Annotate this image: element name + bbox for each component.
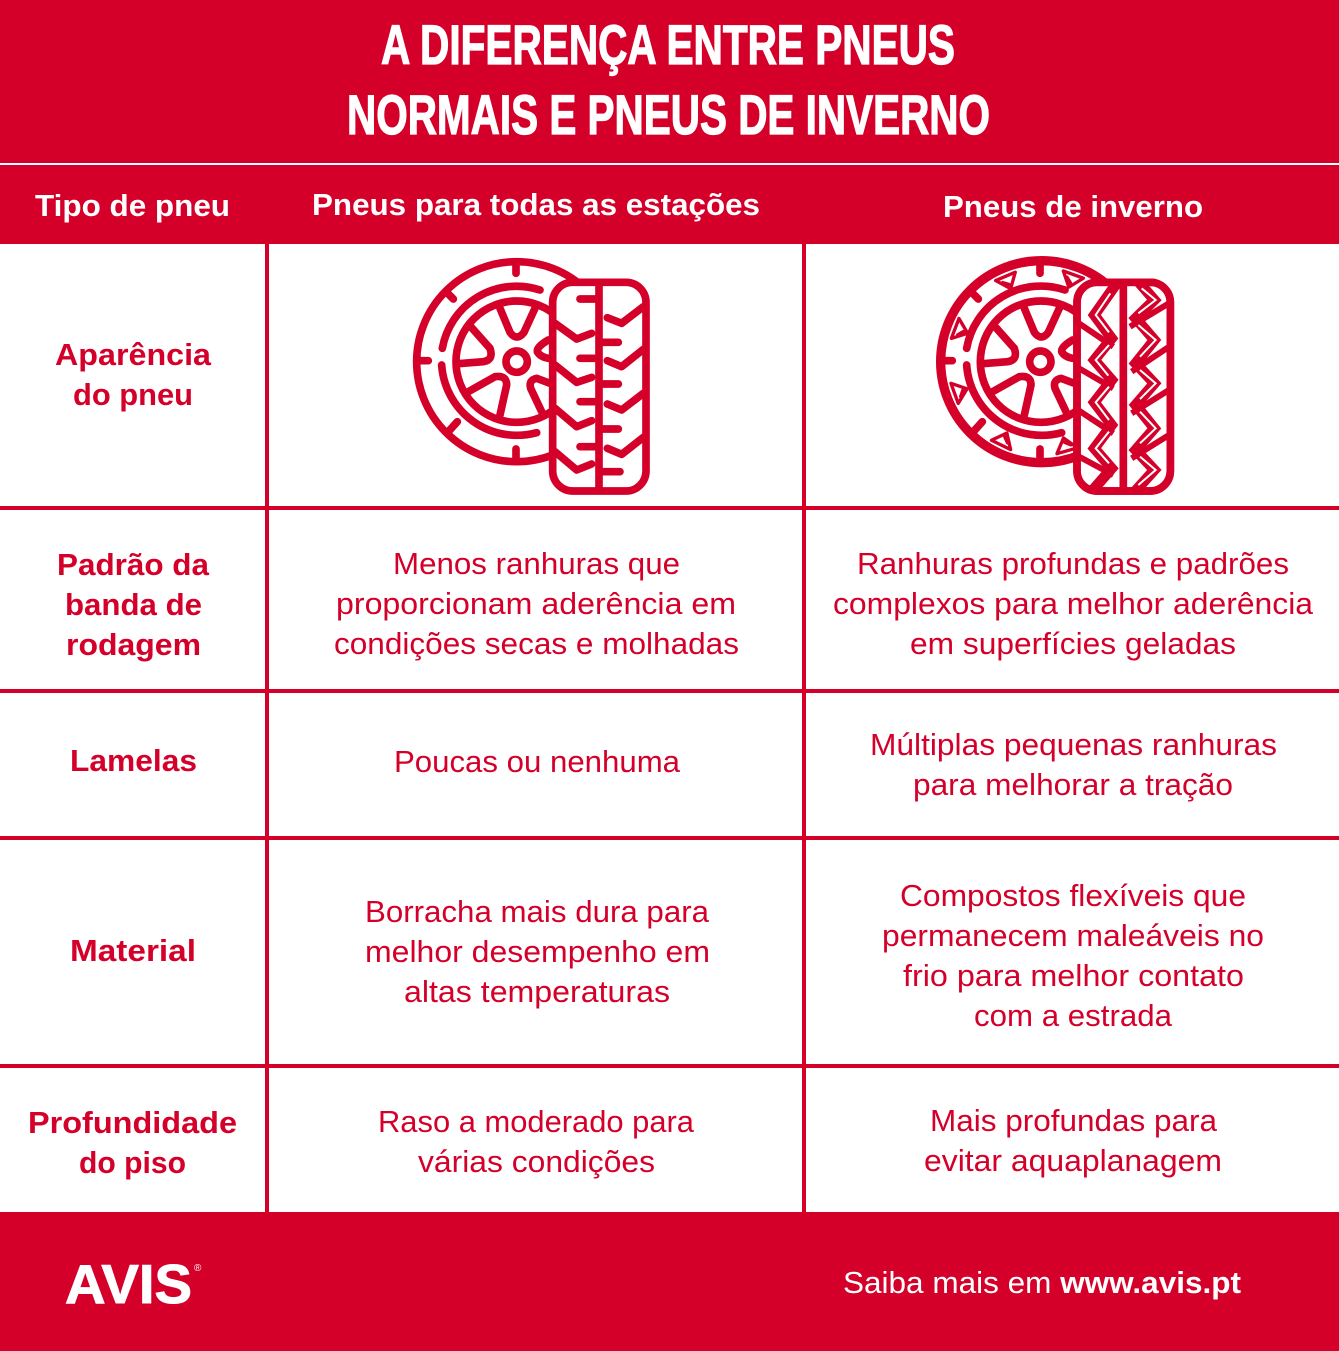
- winter text: Múltiplas pequenas ranhuras: [870, 727, 1277, 762]
- winter text: complexos para melhor aderência: [833, 586, 1314, 621]
- row label: do pneu: [73, 377, 193, 412]
- title banner: [0, 0, 1339, 163]
- all-season text: várias condições: [418, 1144, 655, 1179]
- title: NORMAIS E PNEUS DE INVERNO: [347, 83, 990, 146]
- call to action: Saiba mais em www.avis.pt: [843, 1265, 1241, 1300]
- winter text: frio para melhor contato: [903, 958, 1244, 993]
- row label: Padrão da: [57, 547, 210, 582]
- winter text: Ranhuras profundas e padrões: [857, 546, 1289, 581]
- winter text: [882, 878, 1264, 1033]
- all-season text: Borracha mais dura para: [365, 894, 710, 929]
- footer: [0, 1212, 1339, 1351]
- logo: AVIS: ®: [194, 1263, 202, 1274]
- header: winter tires: Pneus de inverno: [943, 189, 1203, 224]
- all-season text: Poucas ou nenhuma: [394, 744, 681, 779]
- all-season text: [365, 894, 710, 1009]
- row label: Aparência: [55, 337, 212, 372]
- winter text: com a estrada: [974, 998, 1173, 1033]
- winter text: para melhorar a tração: [913, 767, 1233, 802]
- all-season text: condições secas e molhadas: [334, 626, 739, 661]
- table header row: [0, 165, 1339, 244]
- logo: AVIS: AVIS: [65, 1253, 192, 1315]
- winter text: Compostos flexíveis que: [900, 878, 1246, 913]
- row: sipes: [70, 727, 1277, 802]
- all-season text: proporcionam aderência em: [336, 586, 736, 621]
- all-season text: Menos ranhuras que: [393, 546, 680, 581]
- all-season text: Raso a moderado para: [378, 1104, 695, 1139]
- header: tire type: Tipo de pneu: [35, 188, 230, 223]
- row: material: [70, 878, 1264, 1033]
- winter text: evitar aquaplanagem: [924, 1143, 1222, 1178]
- row label: [28, 1105, 237, 1180]
- header: all-season tires: Pneus para todas as estações: [312, 187, 760, 222]
- title: A DIFERENÇA ENTRE PNEUS: [381, 13, 955, 76]
- winter text: Mais profundas para: [930, 1103, 1218, 1138]
- row: tire appearance: [55, 261, 1172, 493]
- winter text: [870, 727, 1277, 802]
- winter text: em superfícies geladas: [910, 626, 1236, 661]
- row label: rodagem: [66, 627, 201, 662]
- table grid: [0, 244, 1339, 1212]
- all-season text: [378, 1104, 695, 1179]
- icon: all-season tire: [417, 262, 646, 491]
- row label: banda de: [65, 587, 202, 622]
- winter text: [833, 546, 1314, 661]
- row label: [57, 547, 210, 662]
- row label: [55, 337, 212, 412]
- all-season text: melhor desempenho em: [365, 934, 710, 969]
- row: tread depth: [28, 1103, 1222, 1180]
- row label: Profundidade: [28, 1105, 237, 1140]
- winter text: [924, 1103, 1222, 1178]
- icon: winter tire: [941, 261, 1172, 493]
- all-season text: altas temperaturas: [404, 974, 670, 1009]
- title: [347, 13, 990, 146]
- row label: do piso: [79, 1145, 186, 1180]
- row label: Lamelas: [70, 743, 197, 778]
- row label: Material: [70, 933, 196, 968]
- winter text: permanecem maleáveis no: [882, 918, 1264, 953]
- row: tread pattern: [57, 546, 1314, 662]
- all-season text: [334, 546, 739, 661]
